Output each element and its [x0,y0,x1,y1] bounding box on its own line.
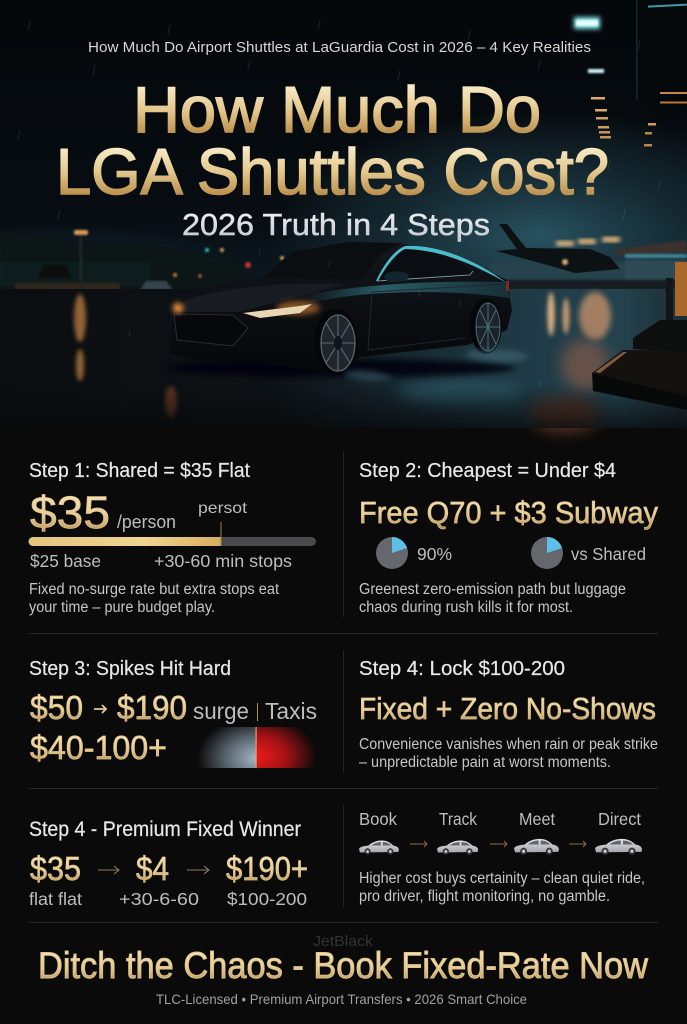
arrow [410,841,427,847]
panel: step 1 [28,460,316,616]
pie: vs shared [531,537,563,569]
car: black sedan [165,242,530,380]
lamp: left tower light [74,230,88,235]
flow labels [359,809,641,829]
bar labels: $25 base [30,551,101,571]
car fog lamp glow [173,303,183,313]
winner heading: Step 4 - Premium Fixed Winner [29,818,301,841]
rain streaks [18,20,660,387]
panel: step 3 [29,658,317,768]
main title: How Much Do [133,73,541,146]
flow labels: Track [439,809,477,829]
price comparison row: $35 [30,850,81,887]
call to action: Ditch the Chaos - Book Fixed-Rate Now [38,945,648,986]
persot label: persot [198,500,248,517]
step 2 highlight: Free Q70 + $3 Subway [359,495,658,530]
surge and taxis labels: surge [193,698,249,724]
step 2 description: Greenest zero-emission path but luggage [359,581,626,598]
building: left terminal silhouette [0,231,250,293]
car headlight glow [276,301,320,315]
price comparison row [30,850,308,887]
step 2 heading: Step 2: Cheapest = Under $4 [359,460,616,482]
price comparison row: $4 [136,850,169,887]
gauge: shuttle versus surge glow [198,727,316,768]
bar labels: +30-60 min stops [154,551,292,571]
overhead lights [574,17,656,146]
panel: premium fixed winner [29,818,308,909]
car roof highlight [376,246,507,283]
car shoulder reflection [300,282,510,303]
flow labels: Book [359,809,397,829]
price row labels: flat flat [29,889,82,909]
flow description: pro driver, flight monitoring, no gamble. [359,888,610,905]
step 4 highlight: Fixed + Zero No-Shows [359,691,656,726]
step 2 description [359,581,626,616]
water spray [345,350,530,380]
step 4 description: Convenience vanishes when rain or peak strike [359,736,658,753]
car window glass [377,248,472,283]
panel: step 4 lock [359,658,658,771]
brand watermark: JetBlack [313,933,374,950]
surge prices [30,689,187,726]
progress bar [28,522,316,546]
surge prices: $190 [117,689,187,726]
car hood sheen [178,284,345,312]
wet tarmac [0,289,687,428]
arrow [490,841,507,847]
flow labels: Direct [598,809,641,829]
front wheel [314,309,358,375]
icon: car book [359,840,399,855]
right terminal structure [636,0,687,118]
taxi price range: $40-100+ [30,729,167,766]
tail light [506,281,509,291]
step 4 description [359,736,658,771]
car window trim [377,271,473,281]
airplane at the gate [480,224,687,290]
car grille [174,314,248,346]
icon: car meet [514,839,559,855]
flow description: Higher cost buys certainity – clean quiet ride, [359,870,645,887]
pie label vs shared: vs Shared [571,544,646,564]
step 1 description: your time – pure budget play. [29,599,215,616]
step 1 description: Fixed no-surge rate but extra stops eat [29,581,280,598]
arrow [569,841,586,847]
flow labels: Meet [519,809,555,829]
icon: car track [437,840,478,855]
price row labels [29,889,307,909]
car mirror [384,271,409,282]
panel: step 2 [359,460,658,616]
curb and bollard [592,262,687,410]
hero: rainy airport night scene [0,0,687,433]
flow description [359,870,645,905]
car headlight [243,304,312,318]
main title: LGA Shuttles Cost? [56,135,609,208]
step 1 description [29,581,280,616]
bar labels [30,551,292,571]
price row labels: +30-6-60 [119,889,199,909]
main title [56,73,609,208]
per person label: /person [117,512,176,532]
top caption: How Much Do Airport Shuttles at LaGuardia Cost in 2026 – 4 Key Realities [88,39,591,56]
surge prices: $50 [30,689,83,726]
surge and taxis labels: Taxis [265,698,317,724]
panel: booking flow [359,809,645,905]
rear wheel [470,298,502,354]
step 3 heading: Step 3: Spikes Hit Hard [29,658,231,680]
car door line [368,284,505,350]
tarmac reflections [74,292,611,433]
pie label 90%: 90% [417,544,452,564]
icon: car direct [595,839,642,855]
step 1 heading: Step 1: Shared = $35 Flat [29,460,250,482]
price row labels: $100-200 [227,889,307,909]
subtitle: 2026 Truth in 4 Steps [182,207,490,242]
step 1 price: $35 [30,487,110,538]
distant vehicle [140,281,173,290]
step 2 description: chaos during rush kills it for most. [359,599,573,616]
price comparison row: $190+ [226,850,308,887]
step 4 description: – unpredictable pain at worst moments. [359,754,611,771]
step 4 heading: Step 4: Lock $100-200 [359,658,565,680]
footer tagline: TLC-Licensed • Premium Airport Transfers • 2026 Smart Choice [156,991,527,1007]
surge and taxis labels [193,698,317,724]
distant coloured lights [173,248,284,278]
pie: 90% [376,537,408,569]
